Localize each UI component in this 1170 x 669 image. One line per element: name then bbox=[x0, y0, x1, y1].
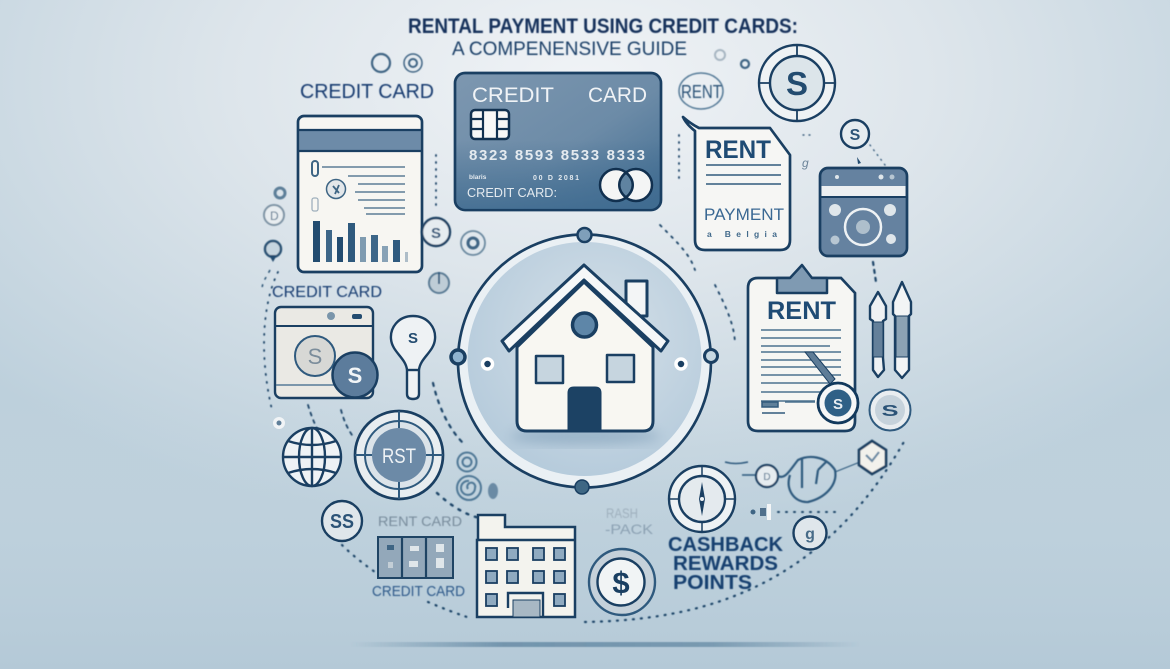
icon: house bbox=[502, 265, 668, 431]
icon: rent oval: RENT bbox=[681, 82, 722, 102]
icon: SS coin: SS bbox=[330, 511, 354, 533]
card network logo bbox=[600, 169, 652, 201]
icon: key balloon: S bbox=[408, 330, 418, 347]
label: cash back faded: -PACK bbox=[605, 521, 654, 537]
small connector icons near card bbox=[422, 218, 485, 293]
title bbox=[408, 15, 798, 60]
icon: RST target: RST bbox=[382, 445, 416, 468]
panel: statement document bbox=[298, 116, 422, 272]
label: cashback rewards points: REWARDS bbox=[673, 553, 778, 575]
icon: SS coin bbox=[322, 501, 362, 541]
small top icons bbox=[372, 50, 749, 72]
title: A COMPENENSIVE GUIDE bbox=[452, 38, 687, 60]
side icons left of document bbox=[262, 188, 285, 290]
label: cash back faded bbox=[605, 505, 654, 537]
icon: large dollar target: S bbox=[786, 65, 808, 102]
panel: credit card bbox=[455, 73, 661, 210]
card heading: CREDIT bbox=[472, 84, 554, 107]
clipboard clip bbox=[777, 265, 827, 293]
icon: dollar coin bottom: $ bbox=[612, 565, 630, 600]
label: cash back faded: RASH bbox=[606, 505, 638, 521]
widget controls bbox=[829, 174, 896, 245]
pen bbox=[805, 352, 835, 384]
title: RENTAL PAYMENT USING CREDIT CARDS: bbox=[408, 15, 798, 38]
icon: small dollar coin right bbox=[841, 120, 869, 148]
side icons left of document: D bbox=[270, 209, 279, 223]
icon: dollar coin: S bbox=[348, 363, 362, 388]
icon: dollar coin bottom bbox=[589, 549, 655, 615]
document bar chart bbox=[313, 221, 408, 262]
dotted connector paths bbox=[264, 135, 905, 622]
document heading: RENT bbox=[705, 136, 771, 164]
icon: RST target bbox=[355, 411, 443, 499]
hub nodes bbox=[451, 228, 718, 494]
icon: rent oval bbox=[679, 73, 723, 109]
icon: apartment building bbox=[477, 514, 575, 617]
label: cashback rewards points: POINTS bbox=[673, 572, 752, 594]
label: rent card: RENT CARD bbox=[378, 513, 462, 529]
document text lines bbox=[312, 161, 405, 214]
card heading bbox=[472, 84, 647, 107]
icon: nine coin: g bbox=[805, 526, 815, 543]
icon: nine coin bbox=[794, 516, 826, 550]
label: credit card top left: CREDIT CARD bbox=[300, 81, 434, 103]
icons: spirals bbox=[457, 452, 498, 500]
panel: card grid bbox=[378, 537, 453, 578]
icon: coin right bbox=[870, 390, 910, 430]
panel: browser payment window bbox=[275, 307, 378, 398]
label: credit card bottom: CREDIT CARD bbox=[372, 584, 465, 600]
document small print: a Belgia bbox=[707, 229, 777, 239]
card small print bbox=[467, 174, 579, 200]
panel: browser payment window: S bbox=[308, 344, 322, 369]
card small print: blaris bbox=[469, 174, 487, 181]
card small print: 00 D 2081 bbox=[533, 175, 579, 182]
clipboard heading: RENT bbox=[767, 297, 836, 325]
label: cashback rewards points: CASHBACK bbox=[668, 534, 784, 556]
icon: pin marker bbox=[273, 417, 285, 429]
icon: heart network bbox=[725, 441, 886, 502]
label: cashback rewards points bbox=[668, 534, 784, 594]
decorative small marks right bbox=[802, 156, 861, 170]
icon: payment marker bbox=[750, 504, 771, 520]
panel: rent payment document bbox=[683, 117, 790, 250]
card number: 8323 8593 8533 8333 bbox=[469, 147, 645, 164]
panel: rent clipboard bbox=[748, 265, 858, 431]
card chip bbox=[471, 110, 509, 139]
icon: large dollar target bbox=[758, 44, 836, 122]
card small print: CREDIT CARD: bbox=[467, 186, 557, 200]
stamp: S bbox=[833, 396, 843, 413]
icon: coin right: S bbox=[882, 403, 899, 420]
central hub bbox=[451, 228, 718, 494]
stamp bbox=[818, 383, 858, 423]
icon: pens bbox=[870, 282, 911, 378]
panel: dashboard widget bbox=[820, 168, 907, 256]
document label: PAYMENT bbox=[704, 206, 784, 224]
icon: compass bbox=[669, 466, 735, 532]
small connector icons near card: S bbox=[431, 225, 441, 242]
icon: heart network: D bbox=[763, 472, 771, 483]
clipboard lines bbox=[761, 330, 841, 402]
label: credit card mid left: CREDIT CARD bbox=[272, 284, 382, 301]
card heading: CARD bbox=[588, 84, 647, 107]
icon: key balloon bbox=[391, 316, 435, 399]
decorative small marks right: g bbox=[802, 156, 809, 170]
icon: globe bbox=[283, 428, 341, 486]
icon: small dollar coin right: S bbox=[850, 127, 861, 144]
